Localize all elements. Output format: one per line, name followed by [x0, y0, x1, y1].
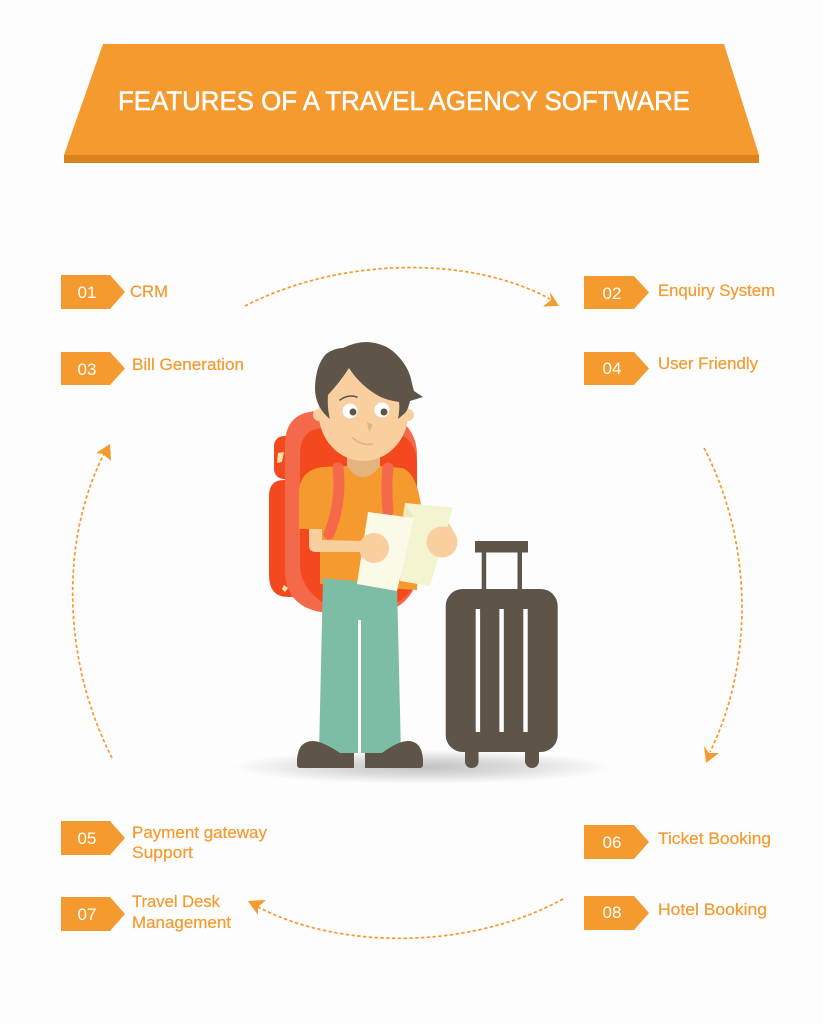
feature 04: User Friendly: 04: [603, 359, 621, 378]
feature 08: Hotel Booking: 08: [603, 903, 621, 922]
feature 02: Enquiry System: 02: [603, 284, 621, 303]
feature 05: Payment gateway Support: 05: [78, 829, 96, 848]
ground shadow: [233, 750, 613, 784]
shirt: [299, 466, 421, 590]
feature 05: Payment gateway Support: Support: [132, 844, 193, 862]
feature 08: Hotel Booking: Hotel Booking: [658, 901, 767, 919]
mouth: [353, 438, 372, 444]
feature 01: CRM: CRM: [130, 283, 168, 301]
arrow: top, CRM to Enquiry System: [245, 268, 559, 306]
backpack straps: [329, 468, 388, 534]
feature 02: Enquiry System: Enquiry System: [658, 282, 775, 300]
arrow: right, down to Ticket Booking: [704, 448, 742, 763]
feature 03: Bill Generation: 03: [78, 360, 96, 379]
shoes: [297, 741, 354, 768]
feature 06: Ticket Booking: Ticket Booking: [658, 830, 771, 848]
neck: [347, 455, 380, 477]
hands: [359, 533, 389, 563]
feature 07: Travel Desk Management: [61, 893, 231, 932]
right arm: [435, 515, 457, 545]
title: FEATURES OF A TRAVEL AGENCY SOFTWARE: [118, 86, 690, 116]
map: [357, 503, 453, 591]
feature 07: Travel Desk Management: Management: [132, 914, 231, 932]
feature 02: Enquiry System: [584, 276, 775, 309]
feature 03: Bill Generation: [61, 352, 244, 385]
feature 01: CRM: [61, 275, 168, 309]
nose: [367, 422, 373, 432]
feature 06: Ticket Booking: 06: [603, 833, 621, 852]
arm front: [309, 529, 365, 552]
arrow: left, up to Bill Generation: [73, 444, 112, 758]
feature 04: User Friendly: User Friendly: [658, 355, 759, 373]
feature 03: Bill Generation: Bill Generation: [132, 356, 244, 374]
feature 05: Payment gateway Support: [61, 821, 268, 862]
feature 07: Travel Desk Management: Travel Desk: [132, 893, 221, 911]
trousers: [319, 578, 401, 753]
eyes: [342, 404, 358, 418]
feature 01: CRM: 01: [78, 283, 96, 302]
feature 08: Hotel Booking: [584, 896, 767, 930]
hair: [315, 342, 423, 419]
feature 07: Travel Desk Management: 07: [78, 905, 96, 924]
feature 06: Ticket Booking: [584, 825, 771, 859]
feature 04: User Friendly: [584, 352, 759, 385]
arrow: bottom, Hotel Booking to Travel Desk: [248, 899, 563, 938]
suitcase: [446, 541, 558, 768]
head: [313, 342, 423, 461]
feature 05: Payment gateway Support: Payment gateway: [132, 824, 268, 842]
title banner: [64, 44, 759, 163]
eyebrow: [340, 396, 357, 400]
backpack: [269, 411, 417, 612]
traveller figure: [269, 342, 458, 768]
